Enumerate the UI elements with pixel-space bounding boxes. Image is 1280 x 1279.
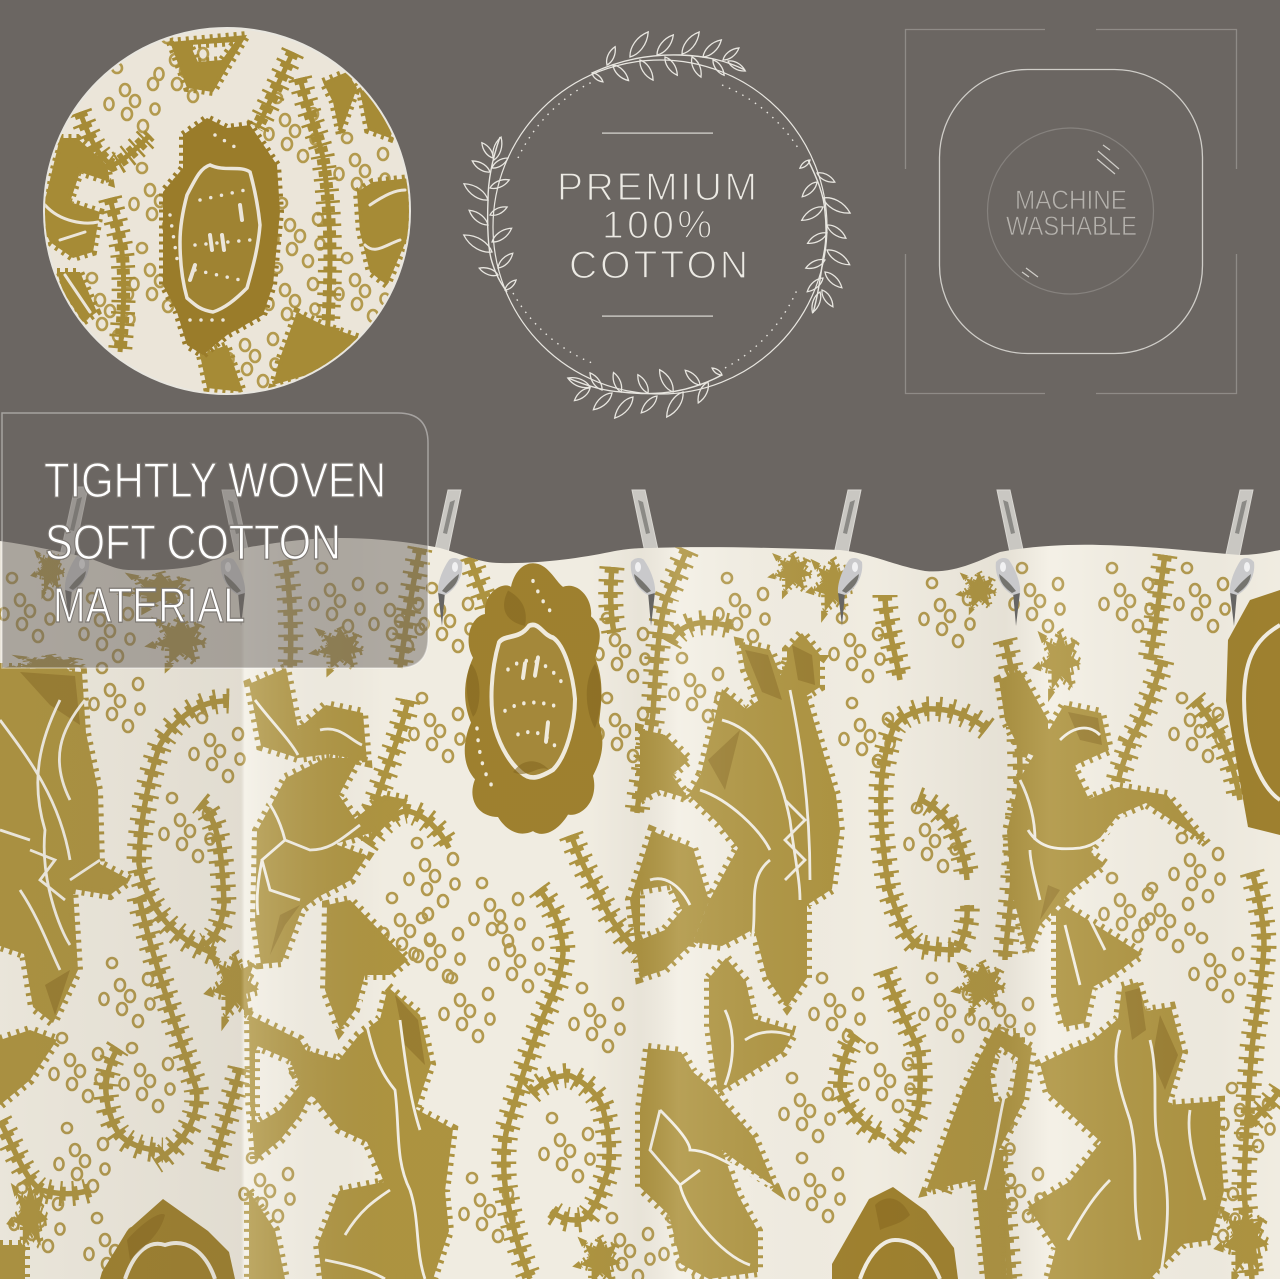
thorned vines: [0, 548, 1280, 1279]
badge text: 100%: [602, 204, 712, 247]
curtain hook arms: [58, 487, 1253, 572]
washable label: [1006, 185, 1137, 241]
glint marks: [1022, 145, 1119, 277]
flower shapes: [0, 549, 1269, 1279]
stars and small buds: [213, 952, 259, 1018]
badge text: COTTON: [569, 244, 748, 287]
drooping leaf: [325, 900, 408, 1030]
lobes above flower: [740, 643, 787, 713]
right branch flower: [1007, 705, 1207, 954]
swatch pattern: [40, 33, 410, 392]
centre star leaf: [640, 729, 689, 800]
bottom-left medallion: [100, 1199, 235, 1279]
swatch upper right leaf: [323, 72, 357, 135]
callout text: TIGHTLY WOVEN: [44, 454, 386, 508]
lower-right flower: [1028, 982, 1224, 1279]
wreath circle outline: [493, 60, 827, 394]
central branch mass: [926, 1027, 1032, 1279]
swatch bottom stem: [200, 345, 243, 392]
bottom-centre medallion: [832, 1187, 958, 1279]
badge text: PREMIUM: [557, 166, 757, 209]
curtain clip hardware: [65, 555, 1254, 626]
flower top leaves: [249, 668, 367, 762]
darker medallion flowers: [100, 563, 1280, 1279]
edge leaf: [0, 1245, 25, 1279]
machine washable badge: [906, 30, 1236, 394]
swatch bottom-right leaves: [273, 312, 360, 385]
left flower: [0, 668, 130, 1023]
wreath badge: [461, 29, 852, 421]
washable label: MACHINE: [1015, 185, 1127, 215]
swatch right leaf: [357, 178, 410, 285]
swatch lower left leaf: [57, 272, 97, 322]
top-right striped leaves: [999, 670, 1048, 762]
flower tip shading: [20, 645, 1178, 1090]
corner brackets: [906, 30, 1236, 394]
right drooping leaf: [1056, 905, 1142, 1027]
medallion cream outlines: [125, 625, 1280, 1279]
lower-centre leaf flower: [640, 1048, 775, 1279]
fabric swatch circle: [40, 28, 410, 394]
centre-left flower: [255, 758, 408, 964]
bottom branch: [566, 367, 723, 421]
swatch left leaf: [40, 138, 110, 258]
right medallion: [1226, 590, 1280, 835]
callout text: SOFT COTTON: [45, 516, 341, 570]
ring dot clusters: [0, 563, 1274, 1279]
fabric fold shading: [0, 541, 1140, 1279]
left branch: [461, 136, 518, 292]
swatch top leaf: [170, 35, 247, 92]
hollow band: [630, 831, 709, 978]
swatch medallion: [163, 118, 280, 355]
swatch medallion detail: [180, 165, 260, 312]
right branch: [799, 158, 852, 314]
small leaf: [0, 1030, 57, 1105]
pointed leaf: [709, 958, 795, 1093]
lower-centre leaf: [249, 1191, 285, 1279]
inner circle: [988, 128, 1154, 294]
swatch far right top: [360, 85, 395, 138]
callout text: MATERIAL: [53, 579, 245, 633]
cream veins: [0, 690, 1205, 1279]
callout text: [44, 454, 386, 633]
washable label: WASHABLE: [1006, 211, 1137, 241]
medallion dark shading: [127, 1198, 910, 1260]
hollow leaf: [249, 1015, 320, 1160]
floral curtain: [0, 530, 1280, 1279]
lower flower: [294, 987, 453, 1279]
top branch: [591, 29, 747, 84]
central leaf flower: [689, 660, 840, 1007]
lobe right: [787, 633, 820, 700]
material callout panel: [2, 413, 428, 668]
divider below: [602, 316, 713, 317]
divider above: [602, 132, 713, 134]
badge text: [557, 166, 757, 287]
rounded square: [940, 70, 1202, 354]
